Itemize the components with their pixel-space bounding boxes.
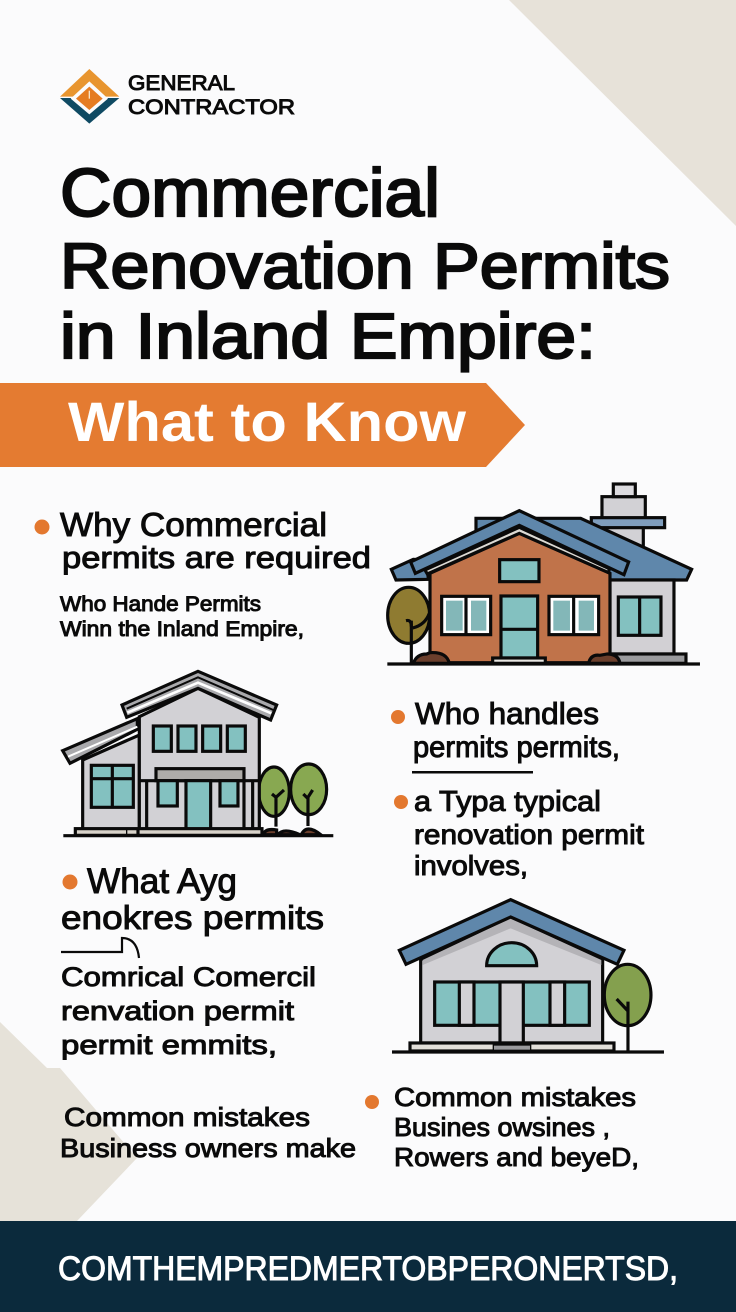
footer bar: COMTHEMPREDMERTOBPERONERTSD, [58,1250,678,1288]
text block: who handles permits: Who handles [415,696,599,731]
text block: why commercial permits: Why Commercial [60,506,327,543]
text block: commercial renovation: renvation permit [61,996,295,1026]
title: in Inland Empire: [60,300,596,372]
logo [60,69,295,124]
text block: who handles permits: permits permits, [413,731,620,764]
banner: what to know: What to Know [68,390,466,453]
icon: brick house with chimney [387,484,700,664]
banner: what to know [0,383,525,467]
logo: GENERAL [128,71,235,95]
title: Commercial [60,155,440,231]
text block: what enokres permits [61,862,324,958]
text block: typical renovation permit: involves, [414,850,528,881]
text block: common mistakes right: Rowers and beyeD, [394,1142,639,1172]
title: Renovation Permits [60,230,670,302]
text block: typical renovation permit: a Typa typical [414,786,601,818]
text block: why commercial permits: Who Hande Permits [60,593,261,616]
text block: typical renovation permit: renovation permit [414,819,644,850]
text block: why commercial permits: permits are required [62,540,371,575]
text block: common mistakes right [365,1082,639,1172]
logo: CONTRACTOR [128,95,295,119]
text block: common mistakes right: Common mistakes [394,1082,636,1112]
text block: what enokres permits: enokres permits [61,899,324,936]
text block: common mistakes right: Busines owsines , [394,1112,610,1142]
decorative corner: bottom left [0,1022,137,1221]
text block: common mistakes left: Common mistakes [64,1102,310,1132]
text block: what enokres permits: What Ayg [87,862,237,901]
text block: why commercial permits: Winn the Inland Empire, [60,618,304,641]
title [60,155,670,372]
text block: commercial renovation: permit emmits, [61,1030,277,1060]
text block: common mistakes left [60,1102,356,1163]
text block: typical renovation permit [394,786,644,881]
text block: commercial renovation [61,962,316,1060]
footer bar [0,1221,736,1312]
decorative corner: top right [509,0,736,226]
text block: why commercial permits [34,506,371,641]
icon: single storey house with tree [392,900,664,1052]
text block: who handles permits [391,696,620,774]
text block: common mistakes left: Business owners make [60,1133,356,1163]
text block: commercial renovation: Comrical Comercil [61,962,316,992]
icon: two storey grey house [63,671,333,836]
